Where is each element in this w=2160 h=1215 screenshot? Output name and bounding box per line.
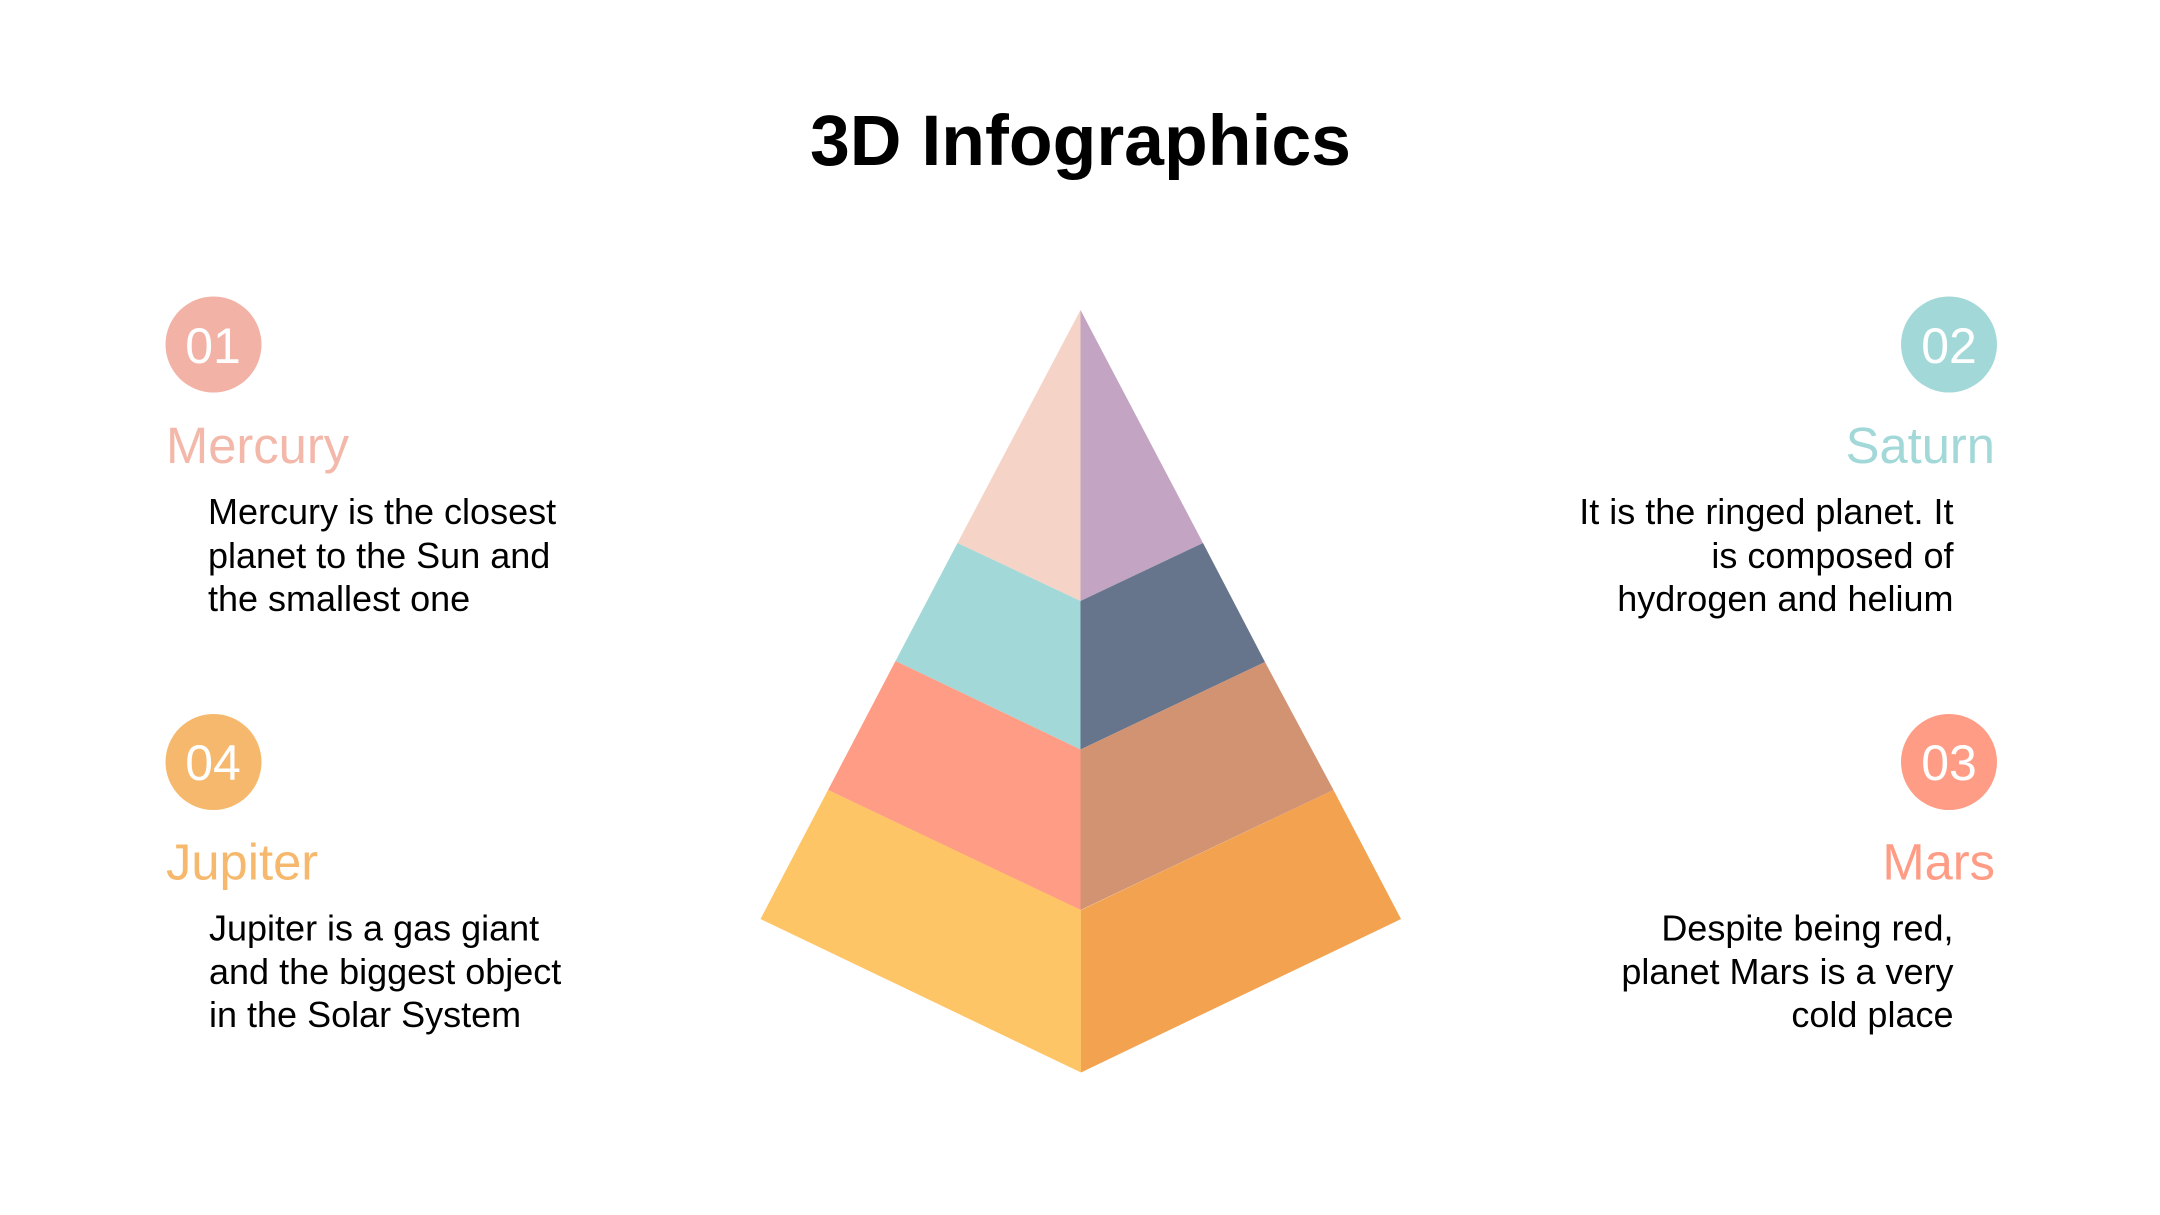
text: Saturn description: hydrogen and helium <box>1617 578 1954 619</box>
text: Saturn description: is composed of <box>1711 535 1954 576</box>
pyramid tier 2 <box>896 543 1265 750</box>
title: 3D Infographics <box>810 101 1351 181</box>
panel: Jupiter <box>166 714 561 1035</box>
heading: Jupiter: Jupiter <box>166 834 318 890</box>
badge 03 <box>1901 714 1997 810</box>
badge 03: 03 <box>1921 735 1977 791</box>
heading: Saturn: Saturn <box>1846 417 1995 474</box>
heading: Mercury: Mercury <box>166 417 350 474</box>
panel: Saturn <box>1579 296 1997 619</box>
pyramid tier 3 <box>828 661 1334 910</box>
text: Saturn description: It is the ringed planet. It <box>1579 491 1954 532</box>
pyramid tier 1: top <box>958 310 1203 601</box>
pyramid tier 4: base <box>760 790 1401 1072</box>
badge 04: 04 <box>185 735 241 791</box>
text: Jupiter description: in the Solar System <box>209 994 521 1035</box>
text: Mars description: Despite being red, <box>1661 908 1954 948</box>
text: Mercury description: planet to the Sun and <box>208 535 550 576</box>
text: Mars description: planet Mars is a very <box>1621 951 1954 992</box>
panel: Mercury <box>166 296 556 619</box>
heading: Mars: Mars <box>1882 834 1995 890</box>
text: Mercury description: Mercury is the closest <box>208 491 556 532</box>
pyramid chart <box>760 310 1401 1072</box>
badge 02: 02 <box>1921 318 1977 374</box>
badge 01: 01 <box>185 318 241 374</box>
text: Mercury description: the smallest one <box>208 578 470 619</box>
text: Jupiter description: and the biggest object <box>209 951 561 992</box>
badge 04 <box>166 714 262 810</box>
text: Jupiter description: Jupiter is a gas giant <box>209 908 539 948</box>
panel: Mars <box>1621 714 1997 1035</box>
text: Mars description: cold place <box>1791 994 1954 1035</box>
badge 01 <box>166 296 262 392</box>
badge 02 <box>1901 296 1997 392</box>
